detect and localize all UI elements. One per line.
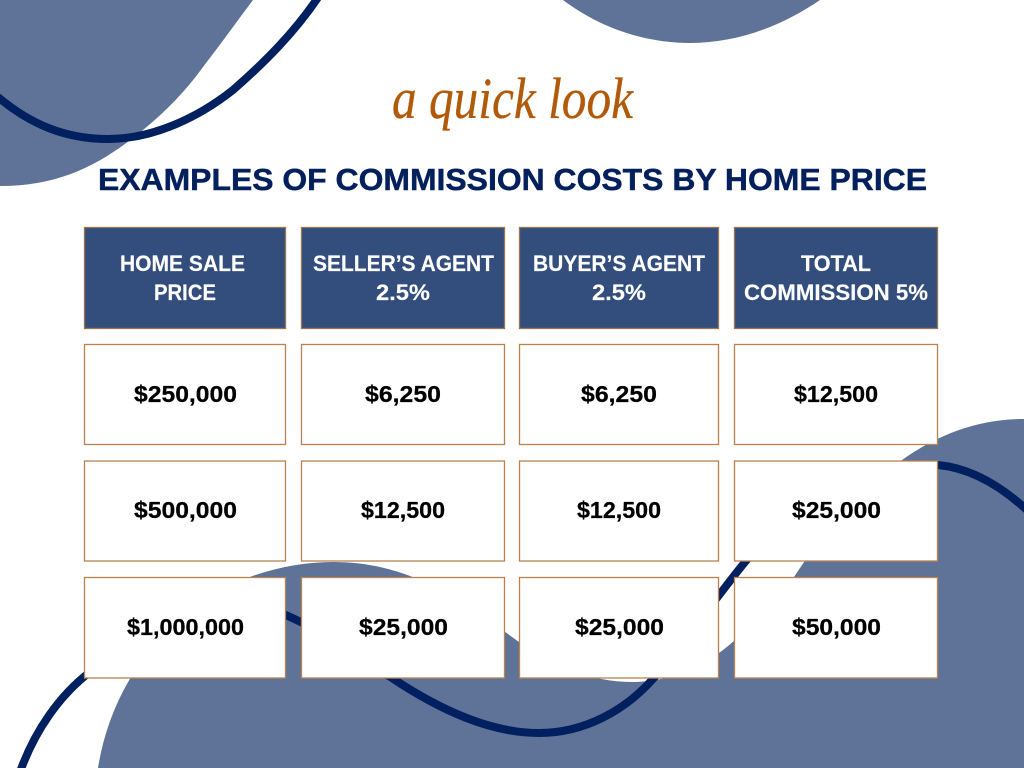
header: buyer's agent bbox=[520, 228, 718, 328]
blob: top centre bbox=[563, 0, 820, 43]
row: $500,000 bbox=[84, 461, 938, 561]
row: $500,000: $12,500 bbox=[577, 497, 661, 523]
header: seller's agent bbox=[302, 228, 504, 328]
row: $1,000,000: $50,000 bbox=[792, 614, 881, 640]
curve: bottom line bbox=[20, 465, 1024, 768]
table bbox=[84, 228, 938, 678]
header: home sale price bbox=[84, 228, 286, 328]
header: total commission: TOTAL bbox=[801, 251, 871, 276]
row: $250,000 bbox=[84, 344, 938, 444]
row: $500,000: $12,500 bbox=[361, 497, 445, 523]
header: seller's agent: 2.5% bbox=[376, 280, 430, 305]
row: $250,000: $250,000 bbox=[134, 381, 237, 407]
header: total commission bbox=[734, 228, 938, 328]
row: $500,000: $25,000 bbox=[792, 497, 881, 523]
row: $250,000: $6,250 bbox=[581, 381, 657, 407]
blob: bottom bbox=[98, 419, 1024, 768]
blob: top left bbox=[0, 0, 253, 186]
row: $1,000,000: $1,000,000 bbox=[127, 614, 244, 640]
row: $1,000,000 bbox=[84, 578, 938, 678]
row: $250,000: $12,500 bbox=[794, 381, 878, 407]
row: $1,000,000: $25,000 bbox=[575, 614, 664, 640]
title: EXAMPLES OF COMMISSION COSTS BY HOME PRICE bbox=[98, 162, 927, 197]
script heading: a quick look bbox=[392, 66, 634, 131]
curve: top left line bbox=[0, 0, 319, 139]
row: $250,000: $6,250 bbox=[365, 381, 441, 407]
header: buyer's agent: BUYER’S AGENT bbox=[533, 251, 706, 276]
header: seller's agent: SELLER’S AGENT bbox=[313, 251, 495, 276]
row: $1,000,000: $25,000 bbox=[359, 614, 448, 640]
header: home sale price: HOME SALE bbox=[120, 251, 245, 276]
header: total commission: COMMISSION 5% bbox=[744, 280, 928, 305]
header: home sale price: PRICE bbox=[154, 280, 216, 305]
row: $500,000: $500,000 bbox=[134, 497, 237, 523]
header: buyer's agent: 2.5% bbox=[592, 280, 646, 305]
